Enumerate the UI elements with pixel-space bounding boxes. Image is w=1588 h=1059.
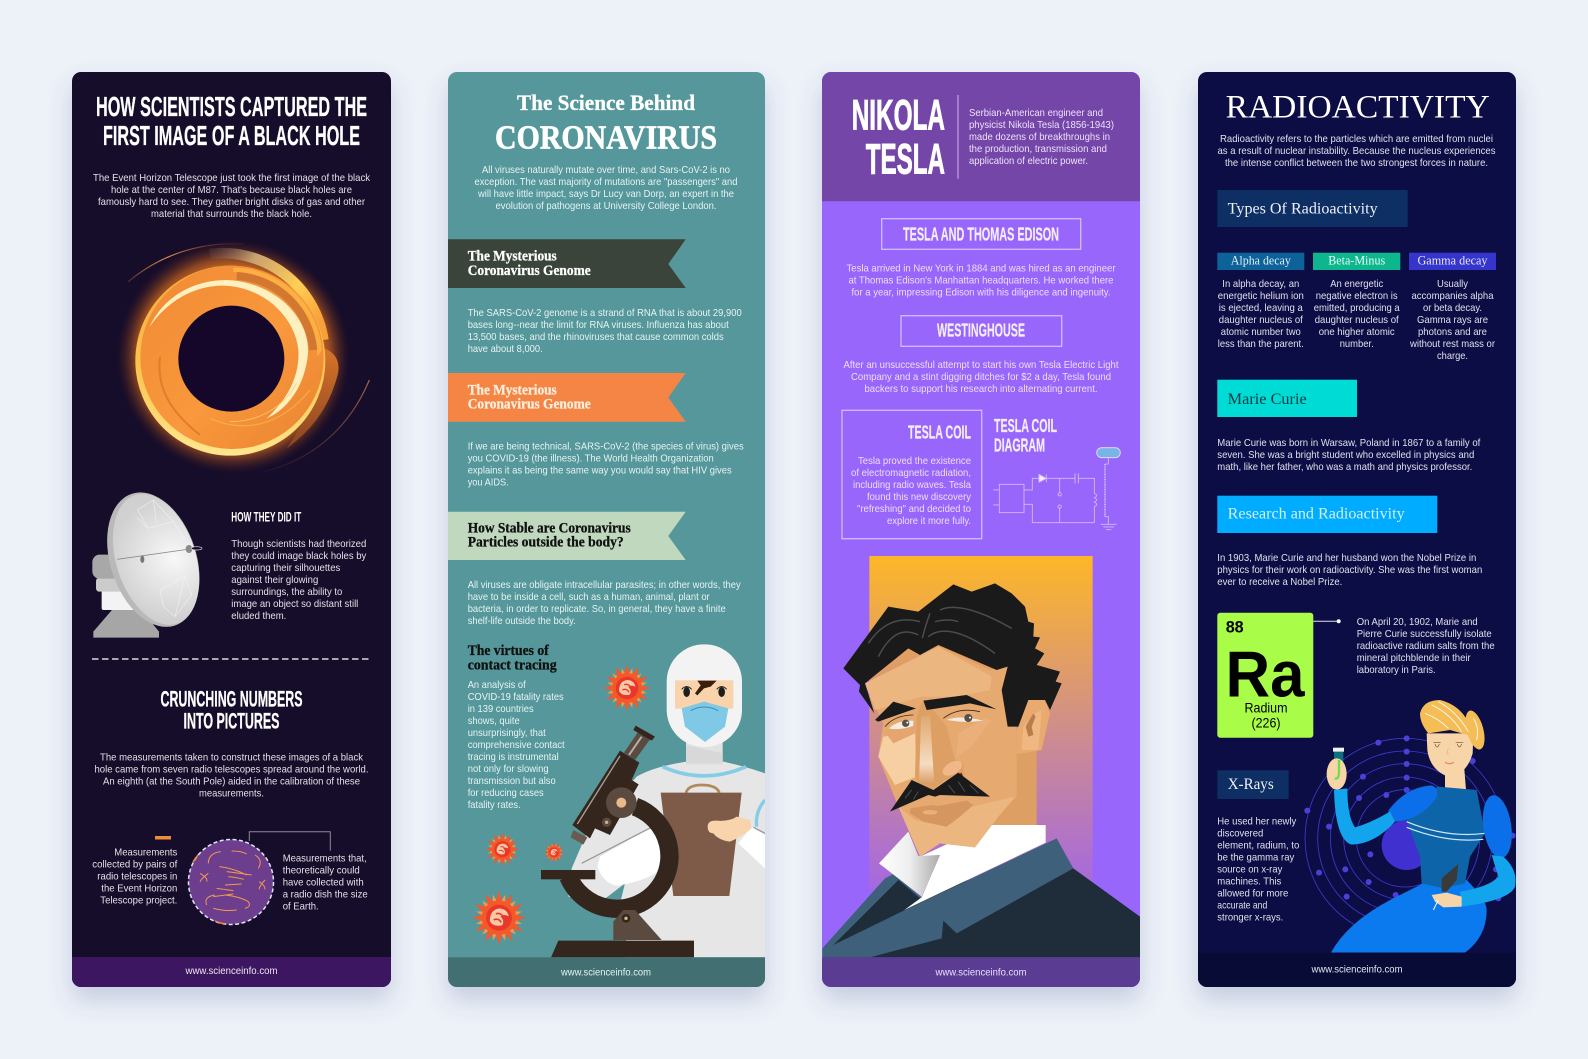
text: genome: 13,500 bases, and the rhinoviruses that cause common colds: [468, 331, 724, 343]
heading: coil diagram: [994, 416, 1057, 455]
text: marie curie: Marie Curie was born in Warsaw, Poland in 1867 to a family of: [1217, 437, 1480, 449]
diagram: measurement circle: [188, 832, 330, 924]
box: tesla coil: found this new discovery: [867, 491, 972, 503]
legend: orange measurements: [92, 836, 177, 906]
title: coronavirus: The Science Behind: [517, 90, 695, 115]
heading: contact tracing: The virtues of: [468, 643, 550, 659]
panel: coronavirus: [448, 72, 765, 987]
text: research: physics for their work on radioactivity. She was the first woman: [1217, 564, 1482, 576]
icon: virus large top: [602, 663, 652, 713]
text: x-rays: allowed for more: [1217, 888, 1288, 900]
text: covid naming: [468, 440, 744, 488]
text: parasites: bacteria, in order to replicate. So, in general, they have a finite: [468, 603, 726, 615]
heading: x-rays: [1217, 770, 1289, 799]
heading: coil diagram: TESLA COIL: [994, 416, 1057, 436]
element tile: radium: 88: [1226, 619, 1244, 637]
icon: radio telescope dish: [91, 480, 216, 639]
intro text: [1218, 133, 1496, 169]
text: radium isolation: radioactive radium salts from the: [1357, 640, 1495, 652]
box: tesla coil: of electromagnetic radiation,: [851, 467, 971, 479]
text: radium isolation: [1357, 616, 1495, 676]
intro text: physicist Nikola Tesla (1856-1943): [969, 119, 1114, 131]
text: edison: at Thomas Edison's Manhattan headquarters. He worked there: [848, 274, 1114, 286]
callout connector: [1313, 619, 1341, 623]
intro text: [474, 164, 738, 212]
text: parasites: All viruses are obligate intracellular parasites; in other words, they: [468, 579, 741, 591]
text: genome: have about 8,000.: [468, 343, 543, 355]
text: x-rays: He used her newly: [1217, 816, 1297, 828]
heading: marie curie: [1217, 380, 1357, 417]
text: marie curie: [1217, 437, 1480, 473]
intro text: the intense conflict between the two strongest forces in nature.: [1225, 157, 1488, 169]
column: alpha decay: is ejected, leaving a: [1219, 302, 1303, 314]
box: tesla coil: Tesla proved the existence: [858, 455, 971, 467]
column: beta minus: negative electron is: [1316, 290, 1398, 302]
intro text: made dozens of breakthroughs in: [969, 131, 1110, 143]
illustration: black hole: [117, 240, 369, 473]
intro text: evolution of pathogens at University College London.: [496, 200, 716, 212]
text: how they did it: against their glowing: [231, 574, 318, 586]
text: parasites: [468, 579, 741, 627]
text: measurements: The measurements taken to construct these images of a black: [100, 752, 364, 764]
title: black hole: FIRST IMAGE OF A BLACK HOLE: [103, 120, 360, 151]
heading: types of radioactivity: Types Of Radioactivity: [1228, 200, 1378, 217]
box: tesla coil: explore it more fully.: [887, 515, 971, 527]
banner: how stable: Particles outside the body?: [468, 535, 624, 551]
column: gamma decay: without rest mass or: [1409, 338, 1495, 350]
intro text: material that surrounds the black hole.: [151, 208, 312, 220]
column: gamma decay: [1409, 253, 1496, 362]
text: contact tracing: transmission but also: [468, 775, 556, 787]
text: westinghouse: [844, 359, 1119, 395]
column: beta minus: one higher atomic: [1319, 326, 1395, 338]
heading: coil diagram: DIAGRAM: [994, 435, 1045, 455]
text: x-rays: accurate and: [1217, 900, 1267, 912]
heading: contact tracing: [468, 643, 557, 673]
text: contact tracing: for reducing cases: [468, 787, 544, 799]
text: radium isolation: Pierre Curie successfully isolate: [1357, 628, 1492, 640]
legend: theoretical measurements: Measurements that,: [283, 852, 367, 864]
banner: mysterious genome orange: The Mysterious: [468, 382, 557, 398]
column: alpha decay: less than the parent.: [1218, 338, 1304, 350]
legend: orange measurements: collected by pairs of: [92, 858, 177, 870]
text: contact tracing: not only for slowing: [468, 763, 549, 775]
illustration: scientist with microscope: [541, 644, 765, 957]
title: nikola tesla: TESLA: [866, 135, 945, 183]
header band: [822, 72, 1140, 201]
text: westinghouse: Company and a stint digging ditches for $2 a day, Tesla found: [851, 371, 1111, 383]
intro text: as a result of nuclear instability. Because the nucleus experiences: [1218, 145, 1496, 157]
intro text: The Event Horizon Telescope just took the first image of the black: [93, 172, 371, 184]
panel: radioactivity: [1198, 72, 1516, 988]
column: beta minus: number.: [1340, 338, 1374, 350]
title: coronavirus: [495, 90, 717, 156]
text: research: ever to receive a Nobel Prize.: [1217, 576, 1342, 588]
element tile: radium: (226): [1252, 714, 1280, 730]
banner: mysterious genome orange: Coronavirus Genome: [468, 396, 591, 412]
banner: mysterious genome dark: Coronavirus Genome: [468, 263, 591, 279]
legend: theoretical measurements: have collected with: [283, 876, 364, 888]
text: contact tracing: tracing is instrumental: [468, 751, 559, 763]
text: x-rays: machines. This: [1217, 876, 1281, 888]
text: how they did it: Though scientists had theorized: [231, 538, 366, 550]
legend: orange measurements: radio telescopes in: [97, 870, 177, 882]
text: genome: The SARS-CoV-2 genome is a strand of RNA that is about 29,900: [468, 307, 742, 319]
text: how they did it: [231, 538, 367, 622]
text: marie curie: seven. She was a bright student who excelled in physics and: [1217, 449, 1474, 461]
heading: research and radioactivity: [1217, 496, 1437, 533]
footer: tesla: [822, 957, 1140, 987]
column: alpha decay: energetic helium ion: [1218, 290, 1304, 302]
heading: research and radioactivity: Research and Radioactivity: [1228, 505, 1405, 522]
footer: radioactivity: www.scienceinfo.com: [1311, 964, 1403, 976]
text: covid naming: you AIDS.: [468, 476, 509, 488]
text: how they did it: they could image black holes by: [231, 550, 367, 562]
column: beta minus: Beta-Minus: [1328, 254, 1385, 268]
text: covid naming: explains it as being the same way you would say that HIV gives: [468, 464, 732, 476]
intro text: famously hard to see. They gather bright disks of gas and other: [98, 196, 365, 208]
column: gamma decay: charge.: [1437, 350, 1468, 362]
footer: coronavirus: [448, 957, 765, 987]
text: contact tracing: in 139 countries: [468, 703, 534, 715]
text: measurements: An eighth (at the South Pole) aided in the calibration of these: [103, 776, 360, 788]
column: gamma decay: Gamma rays are: [1417, 314, 1488, 326]
text: x-rays: stronger x-rays.: [1217, 912, 1283, 924]
heading: x-rays: X-Rays: [1228, 776, 1274, 793]
icon: virus tiny: [543, 842, 565, 863]
column: gamma decay: or beta decay.: [1423, 302, 1482, 314]
legend: orange measurements: Measurements: [114, 846, 177, 858]
footer: tesla: www.scienceinfo.com: [935, 966, 1027, 978]
text: how they did it: surroundings, the ability to: [231, 586, 342, 598]
column: gamma decay: Gamma decay: [1418, 254, 1488, 268]
legend: theoretical measurements: theoretically could: [283, 864, 360, 876]
text: radium isolation: laboratory in Paris.: [1357, 664, 1436, 676]
title: black hole: [96, 91, 367, 151]
text: contact tracing: [468, 679, 565, 811]
column: beta minus: daughter nucleus of: [1315, 314, 1399, 326]
text: x-rays: discovered: [1217, 828, 1263, 840]
text: parasites: shelf-life outside the body.: [468, 615, 576, 627]
column: alpha decay: atomic number two: [1221, 326, 1301, 338]
banner: mysterious genome dark: [448, 239, 686, 288]
heading: types of radioactivity: [1217, 190, 1408, 227]
heading: crunching numbers: INTO PICTURES: [184, 708, 280, 733]
footer: radioactivity: [1198, 953, 1516, 988]
heading box: westinghouse: WESTINGHOUSE: [937, 321, 1025, 341]
text: contact tracing: shows, quite: [468, 715, 520, 727]
heading: marie curie: Marie Curie: [1228, 391, 1307, 408]
diagram: tesla coil circuit: [993, 448, 1120, 530]
intro text: [93, 172, 371, 220]
text: research: In 1903, Marie Curie and her husband won the Nobel Prize in: [1217, 552, 1476, 564]
heading: contact tracing: contact tracing: [468, 657, 557, 673]
element tile: radium: [1217, 613, 1313, 738]
intro text: will have little impact, says Dr Lucy van Dorp, an expert in the: [477, 188, 734, 200]
text: westinghouse: backers to support his research into alternating current.: [864, 383, 1098, 395]
text: edison: Tesla arrived in New York in 1884 and was hired as an engineer: [846, 262, 1116, 274]
title: nikola tesla: NIKOLA: [852, 91, 945, 139]
illustration: tesla portrait: [822, 556, 1140, 957]
column: gamma decay: accompanies alpha: [1412, 290, 1494, 302]
column: gamma decay: photons and are: [1418, 326, 1487, 338]
text: genome: [468, 307, 742, 355]
text: how they did it: eluded them.: [231, 610, 286, 622]
text: marie curie: math, like her father, who was a math and physics professor.: [1217, 461, 1472, 473]
column: beta minus: emitted, producing a: [1314, 302, 1400, 314]
legend: theoretical measurements: a radio dish the size: [283, 888, 368, 900]
text: contact tracing: fatality rates.: [468, 799, 521, 811]
banner: how stable: [448, 512, 686, 560]
legend: orange measurements: Telescope project.: [100, 894, 177, 906]
text: x-rays: element, radium, to: [1217, 840, 1299, 852]
text: covid naming: If we are being technical, SARS-CoV-2 (the species of virus) gives: [468, 440, 744, 452]
column: beta minus: [1313, 253, 1400, 350]
intro text: application of electric power.: [969, 155, 1088, 167]
text: parasites: have to be inside a cell, such as a human, animal, plant or: [468, 591, 710, 603]
text: how they did it: image an object so distant still: [231, 598, 358, 610]
intro text: the production, transmission and: [969, 143, 1107, 155]
intro text: hole at the center of M87. That's because black holes are: [111, 184, 352, 196]
footer: coronavirus: www.scienceinfo.com: [560, 966, 651, 978]
banner: how stable: How Stable are Coronavirus: [468, 521, 631, 537]
banner: mysterious genome orange: [448, 373, 686, 422]
text: x-rays: [1217, 816, 1299, 924]
heading: crunching numbers: CRUNCHING NUMBERS: [160, 687, 302, 712]
column: gamma decay: Usually: [1437, 278, 1469, 290]
panel: nikola tesla: [822, 72, 1140, 987]
column: alpha decay: In alpha decay, an: [1222, 278, 1299, 290]
text: covid naming: you COVID-19 (the illness). The World Health Organization: [468, 452, 714, 464]
intro text: exception. The vast majority of mutations are "passengers" and: [474, 176, 738, 188]
text: westinghouse: After an unsuccessful attempt to start his own Tesla Electric Light: [844, 359, 1119, 371]
legend: theoretical measurements: of Earth.: [283, 900, 319, 912]
box: tesla coil: including radio waves. Tesla: [853, 479, 971, 491]
text: genome: bases long--near the limit for RNA viruses. Influenza has about: [468, 319, 729, 331]
intro text: Radioactivity refers to the particles which are emitted from nuclei: [1220, 133, 1493, 145]
text: edison: [846, 262, 1116, 298]
heading: crunching numbers: [160, 687, 302, 733]
legend: orange measurements: the Event Horizon: [101, 882, 177, 894]
column: alpha decay: daughter nucleus of: [1219, 314, 1303, 326]
footer: black hole: www.scienceinfo.com: [185, 965, 278, 977]
text: research: [1217, 552, 1482, 588]
intro text: All viruses naturally mutate over time, and Sars-CoV-2 is no: [482, 164, 730, 176]
column: alpha decay: Alpha decay: [1231, 254, 1292, 268]
intro text: [969, 107, 1114, 167]
title: radioactivity: RADIOACTIVITY: [1226, 90, 1490, 126]
column: beta minus: An energetic: [1330, 278, 1383, 290]
box: tesla coil: "refreshing" and decided to: [857, 503, 971, 515]
text: contact tracing: COVID-19 fatality rates: [468, 691, 564, 703]
text: measurements: [94, 752, 368, 800]
text: edison: for a year, impressing Edison with his diligence and ingenuity.: [852, 286, 1110, 298]
text: x-rays: source on x-ray: [1217, 864, 1283, 876]
text: contact tracing: unsurprisingly, that: [468, 727, 546, 739]
box: tesla coil: TESLA COIL: [908, 423, 971, 443]
text: radium isolation: mineral pitchblende in their: [1357, 652, 1471, 664]
title: black hole: HOW SCIENTISTS CAPTURED THE: [96, 91, 367, 122]
element tile: radium: Radium: [1244, 699, 1288, 715]
heading box: tesla and edison: [882, 219, 1081, 249]
panel: black hole: [72, 72, 391, 987]
text: contact tracing: comprehensive contact: [468, 739, 565, 751]
footer: black hole: [72, 957, 391, 987]
text: x-rays: be the gamma ray: [1217, 852, 1295, 864]
intro text: Serbian-American engineer and: [969, 107, 1103, 119]
heading box: westinghouse: [901, 316, 1062, 346]
illustration: marie curie: [1304, 700, 1516, 953]
text: measurements: measurements.: [199, 788, 264, 800]
text: contact tracing: An analysis of: [468, 679, 526, 691]
banner: mysterious genome dark: The Mysterious: [468, 249, 557, 265]
column: alpha decay: [1217, 253, 1304, 350]
element tile: radium: Ra: [1226, 638, 1305, 711]
icon: virus large bottom: [470, 889, 528, 947]
text: how they did it: capturing their silhouettes: [231, 562, 340, 574]
icon: virus small left: [484, 831, 520, 867]
text: measurements: hole came from seven radio telescopes spread around the world.: [94, 764, 368, 776]
text: radium isolation: On April 20, 1902, Marie and: [1357, 616, 1478, 628]
box: tesla coil: [842, 410, 982, 539]
heading box: tesla and edison: TESLA AND THOMAS EDISON: [903, 225, 1059, 245]
legend: theoretical measurements: [283, 852, 368, 912]
heading: how they did it: HOW THEY DID IT: [231, 509, 302, 525]
title: nikola tesla: [852, 91, 945, 183]
title: coronavirus: CORONAVIRUS: [495, 119, 717, 156]
